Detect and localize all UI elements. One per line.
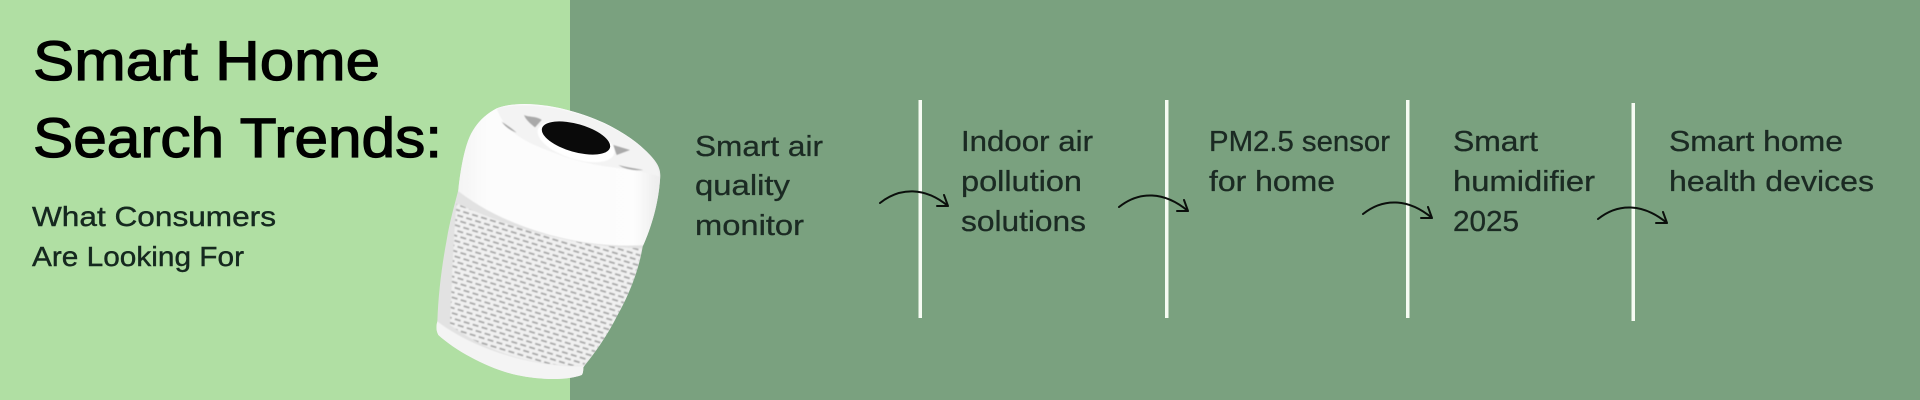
- step 2 text: indoor air pollution solutions: pollution: [961, 166, 1082, 198]
- subtitle: What Consumers: [32, 201, 276, 232]
- icon: black purifier top display: [538, 115, 614, 161]
- step 1 text: smart air quality monitor: [695, 131, 824, 242]
- panel: light green left background: [0, 0, 570, 400]
- subtitle: Are Looking For: [32, 241, 244, 272]
- title: Search Trends:: [33, 106, 442, 169]
- title: [33, 29, 442, 169]
- step 1 text: smart air quality monitor: monitor: [695, 210, 805, 242]
- step 4 text: smart humidifier 2025: humidifier: [1453, 166, 1596, 198]
- step 2 text: indoor air pollution solutions: Indoor air: [961, 126, 1094, 158]
- arrow: step 1 to step 2: [880, 191, 948, 206]
- arrow: step 3 to step 4: [1363, 202, 1432, 218]
- panel: muted green right background: [570, 0, 1920, 400]
- step 1 text: smart air quality monitor: quality: [695, 170, 791, 202]
- divider lines: [918, 100, 1635, 321]
- icon: white air purifier: [436, 104, 660, 379]
- step 4 text: smart humidifier 2025: 2025: [1453, 206, 1519, 238]
- subtitle: [32, 201, 276, 272]
- step 2 text: indoor air pollution solutions: [961, 126, 1094, 238]
- step 3 text: PM2.5 sensor for home: PM2.5 sensor: [1209, 126, 1391, 158]
- step 5 text: smart home health devices: [1669, 126, 1874, 198]
- step 4 text: smart humidifier 2025: Smart: [1453, 126, 1538, 158]
- step 4 text: smart humidifier 2025: [1453, 126, 1596, 238]
- arrow: step 4 to step 5: [1598, 207, 1667, 223]
- arrow: step 2 to step 3: [1119, 195, 1188, 211]
- step 2 text: indoor air pollution solutions: solutions: [961, 206, 1086, 238]
- step 3 text: PM2.5 sensor for home: for home: [1209, 166, 1335, 198]
- step 1 text: smart air quality monitor: Smart air: [695, 131, 824, 163]
- step 3 text: PM2.5 sensor for home: [1209, 126, 1391, 198]
- step 5 text: smart home health devices: Smart home: [1669, 126, 1843, 158]
- step 5 text: smart home health devices: health devices: [1669, 166, 1874, 198]
- title: Smart Home: [33, 29, 380, 92]
